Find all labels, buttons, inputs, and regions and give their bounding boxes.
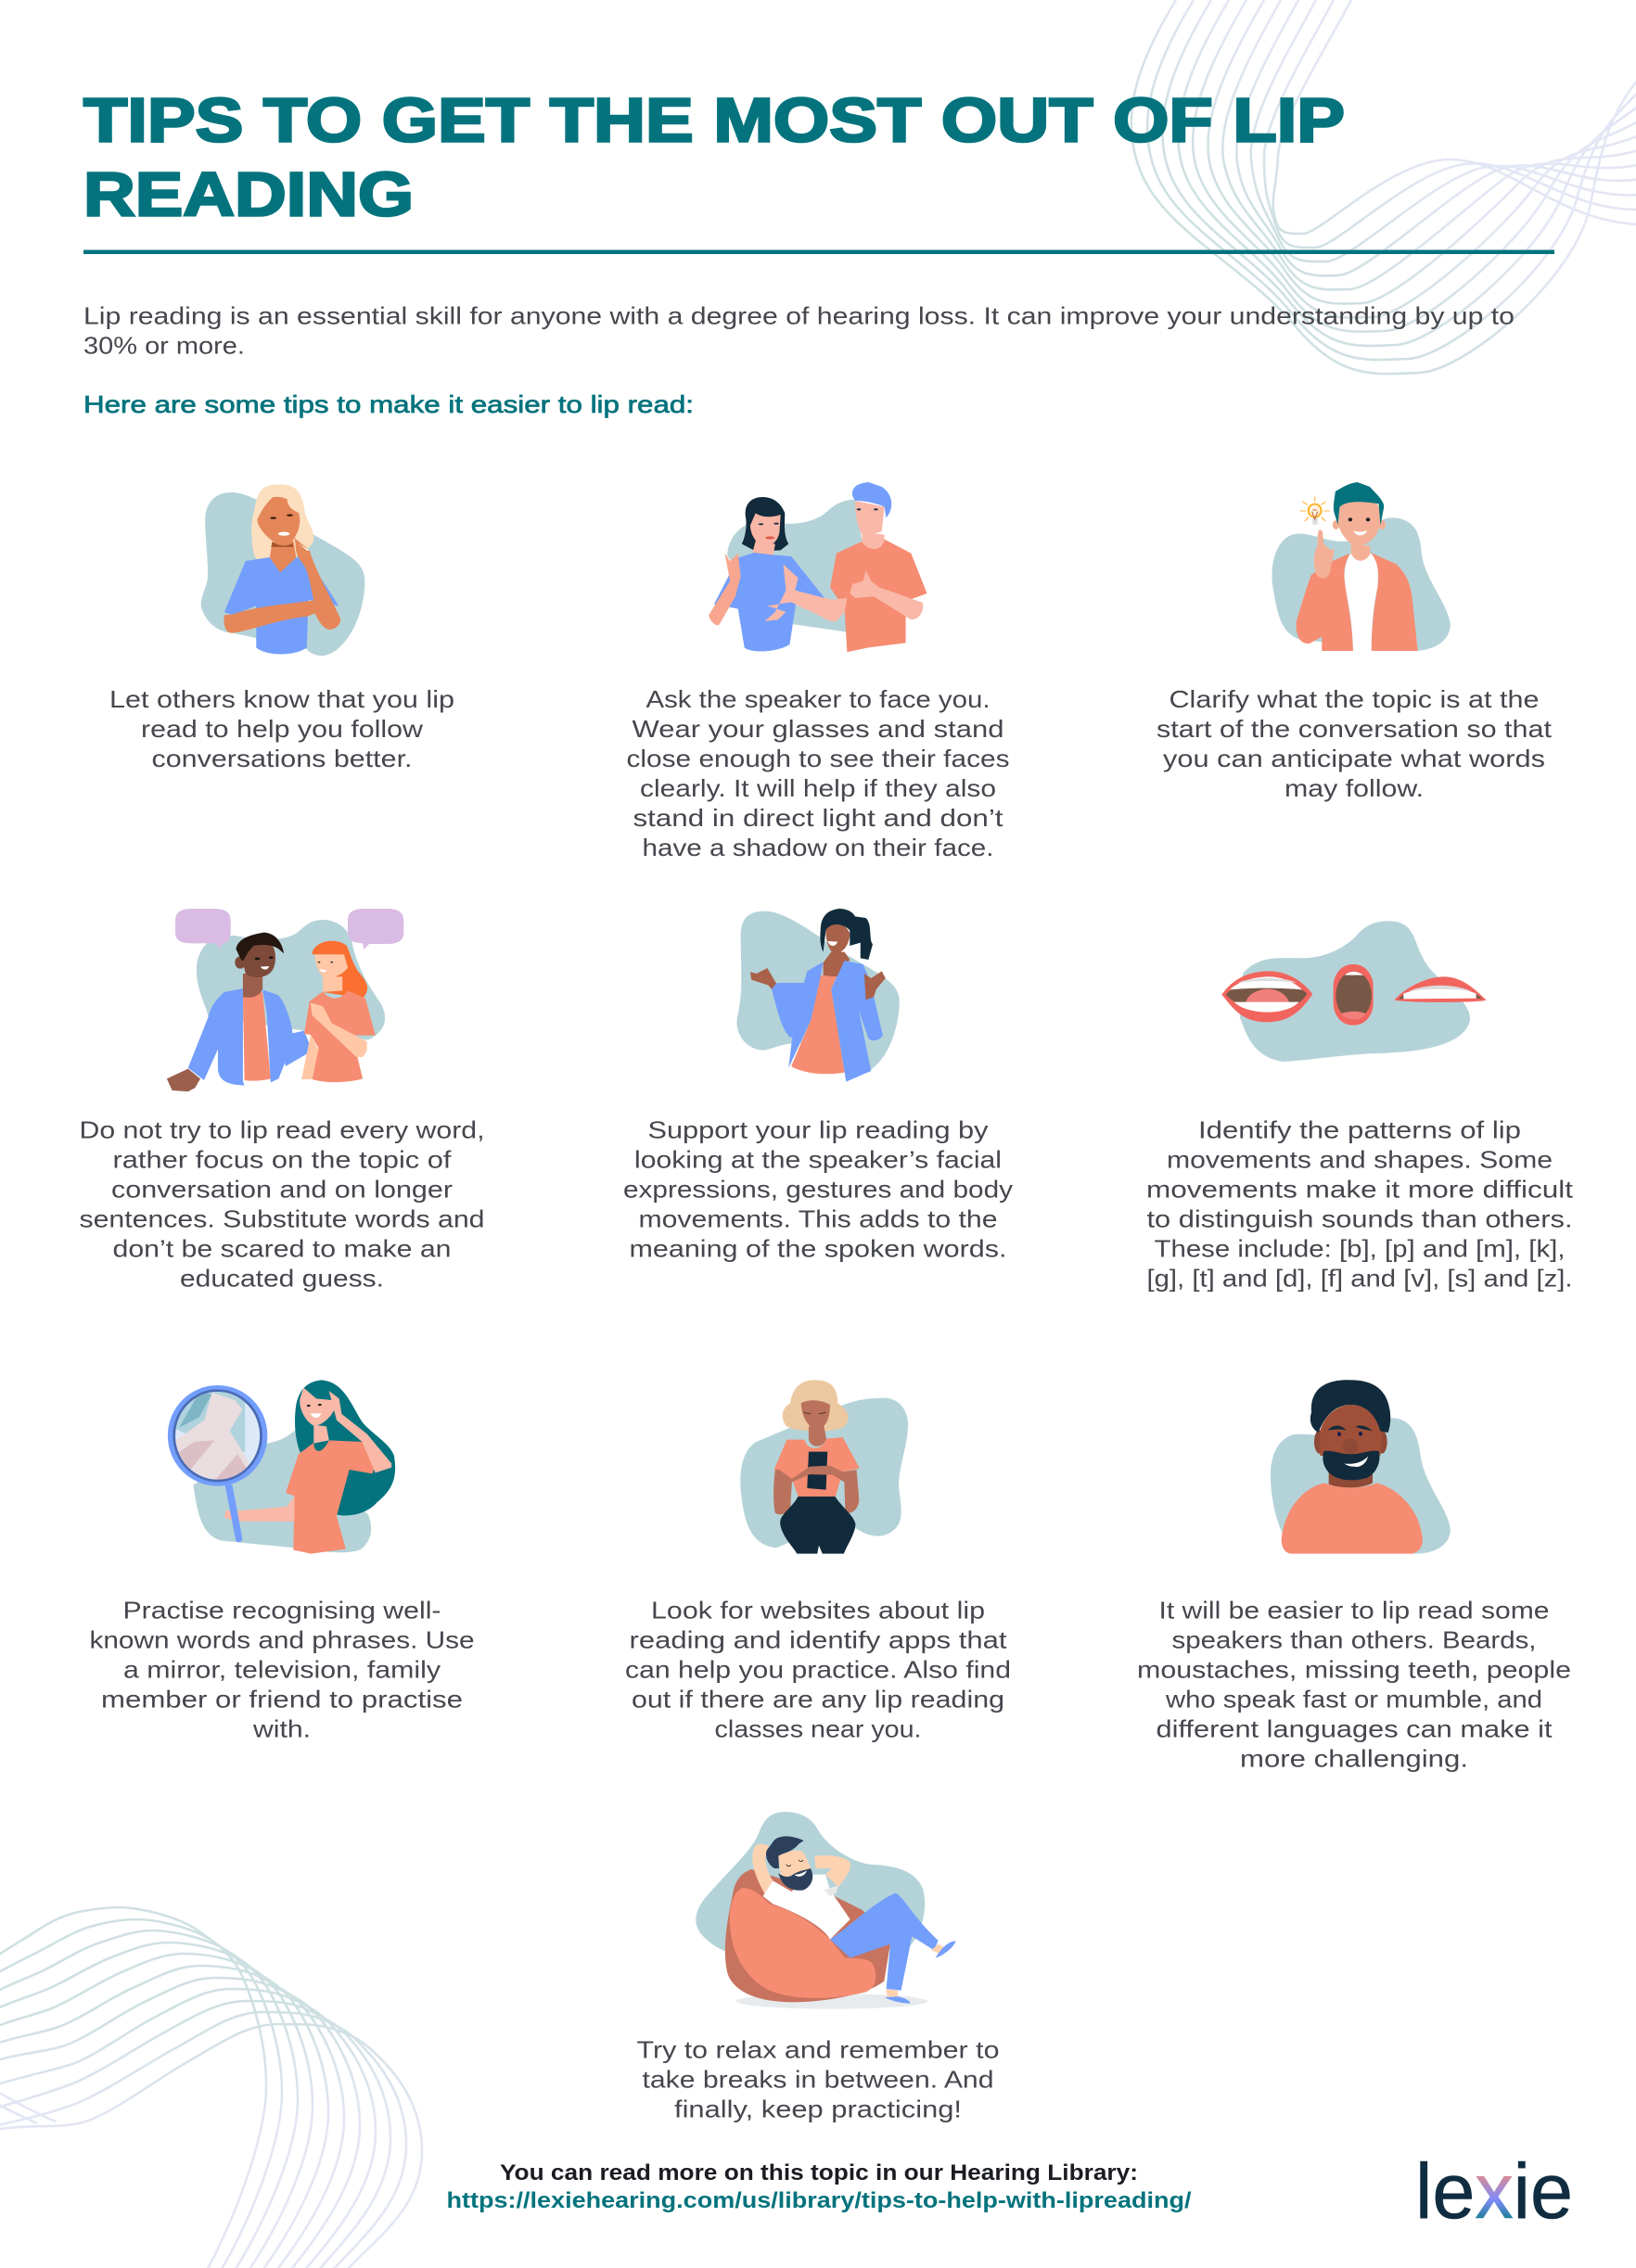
- panel: tip 7: [89, 1380, 475, 1743]
- tip 4 text: rather focus on the topic of: [113, 1146, 452, 1174]
- tip 5 text: looking at the speaker’s facial: [634, 1146, 1002, 1174]
- tip 7 text: known words and phrases. Use: [89, 1626, 475, 1654]
- tip 4 text: don’t be scared to make an: [113, 1235, 451, 1263]
- footer text: https://lexiehearing.com/us/library/tips-to-help-with-lipreading/: [447, 2188, 1192, 2213]
- icon: mirror: [168, 1385, 267, 1542]
- panel: tip 10: [636, 1812, 1000, 2123]
- mouth two: [1334, 964, 1374, 1026]
- subheading: Here are some tips to make it easier to lip read:: [83, 390, 694, 418]
- tip 5 text: movements. This adds to the: [638, 1205, 998, 1233]
- footer text: [447, 2160, 1192, 2213]
- title: TIPS TO GET THE MOST OUT OF LIP: [83, 85, 1345, 156]
- panel: tip 2: [627, 482, 1009, 861]
- tip 7 text: [89, 1597, 475, 1743]
- tip 9 text: who speak fast or mumble, and: [1165, 1686, 1542, 1714]
- tip 4 text: [80, 1116, 484, 1293]
- title: [83, 85, 1345, 230]
- panel: tip 3: [1157, 482, 1553, 802]
- tip 1 text: read to help you follow: [141, 715, 423, 743]
- illustration: man with beard: [1271, 1380, 1451, 1554]
- icon: speech bubble left: [175, 909, 231, 949]
- tip 9 text: different languages can make it: [1156, 1715, 1553, 1743]
- panel: tip 4: [80, 909, 484, 1293]
- title: READING: [83, 159, 414, 230]
- title rule: [83, 250, 1554, 254]
- panel: tip 8: [625, 1380, 1011, 1743]
- tip 9 text: more challenging.: [1240, 1745, 1468, 1773]
- tip 3 text: may follow.: [1285, 774, 1424, 802]
- tip 7 text: member or friend to practise: [101, 1686, 463, 1714]
- tip 6 text: Identify the patterns of lip: [1198, 1116, 1521, 1144]
- tip 6 text: [1146, 1116, 1574, 1293]
- tip 5 text: [623, 1116, 1013, 1263]
- illustration: woman gesturing: [736, 909, 900, 1082]
- tip 2 text: [627, 685, 1009, 861]
- tip 3 text: [1157, 685, 1553, 802]
- tip 10 text: take breaks in between. And: [642, 2066, 994, 2094]
- tip 7 text: with.: [252, 1715, 311, 1743]
- tip 3 text: Clarify what the topic is at the: [1169, 685, 1540, 713]
- tip 4 text: sentences. Substitute words and: [80, 1205, 484, 1233]
- illustration: three mouth shapes: [1221, 921, 1487, 1062]
- tip 2 text: stand in direct light and don’t: [633, 804, 1003, 832]
- decorative wave top right: [1131, 0, 1636, 374]
- panel: tip 1: [109, 484, 454, 772]
- tip 4 text: conversation and on longer: [111, 1176, 453, 1204]
- illustration: woman with mirror: [168, 1380, 395, 1554]
- tip 8 text: reading and identify apps that: [629, 1626, 1007, 1654]
- tip 10 text: finally, keep practicing!: [674, 2096, 962, 2123]
- tip 7 text: a mirror, television, family: [123, 1656, 441, 1684]
- tip 9 text: speakers than others. Beards,: [1172, 1626, 1536, 1654]
- tip 10 text: [636, 2036, 1000, 2123]
- illustration: man with lightbulb: [1272, 482, 1451, 651]
- tip 4 text: Do not try to lip read every word,: [80, 1116, 484, 1144]
- illustration: two people talking: [709, 482, 927, 652]
- tip 3 text: you can anticipate what words: [1163, 745, 1545, 772]
- tip 8 text: classes near you.: [714, 1715, 922, 1743]
- tip 2 text: clearly. It will help if they also: [640, 774, 996, 802]
- tip 8 text: out if there are any lip reading: [632, 1686, 1004, 1714]
- panel: tip 9: [1137, 1380, 1571, 1773]
- tip 2 text: close enough to see their faces: [627, 745, 1009, 772]
- tip 2 text: Ask the speaker to face you.: [645, 685, 991, 713]
- tip 7 text: Practise recognising well-: [122, 1597, 441, 1625]
- tip 6 text: [g], [t] and [d], [f] and [v], [s] and [z].: [1146, 1265, 1573, 1293]
- tip 8 text: Look for websites about lip: [651, 1597, 985, 1625]
- tip 5 text: meaning of the spoken words.: [629, 1235, 1007, 1263]
- tip 6 text: to distinguish sounds than others.: [1146, 1205, 1573, 1233]
- illustration: couple with speech bubbles: [167, 909, 403, 1091]
- tip 8 text: [625, 1597, 1011, 1743]
- tip 9 text: It will be easier to lip read some: [1159, 1597, 1549, 1625]
- panel: tip 6: [1146, 921, 1574, 1293]
- intro text: Lip reading is an essential skill for anyone with a degree of hearing loss. It can improve your understanding by up to: [83, 302, 1515, 330]
- tip 5 text: expressions, gestures and body: [623, 1176, 1013, 1204]
- tip 1 text: [109, 685, 454, 772]
- tip 6 text: movements and shapes. Some: [1167, 1146, 1553, 1174]
- tip 9 text: [1137, 1597, 1571, 1773]
- tip 2 text: Wear your glasses and stand: [633, 715, 1003, 743]
- panel: tip 5: [623, 909, 1013, 1263]
- tip 6 text: These include: [b], [p] and [m], [k],: [1154, 1235, 1566, 1263]
- tip 6 text: movements make it more difficult: [1146, 1176, 1574, 1204]
- icon: speech bubble right: [348, 909, 403, 949]
- decorative wave bottom left: [0, 1907, 422, 2268]
- logo: lexie: lexie: [1415, 2147, 1573, 2235]
- tip 9 text: moustaches, missing teeth, people: [1137, 1656, 1571, 1684]
- intro text: [83, 302, 1515, 360]
- mouth three: [1394, 976, 1487, 1002]
- footer text: You can read more on this topic in our Hearing Library:: [500, 2160, 1138, 2185]
- tip 1 text: Let others know that you lip: [109, 685, 454, 713]
- tip 10 text: Try to relax and remember to: [636, 2036, 1000, 2064]
- icon: lightbulb: [1300, 497, 1330, 525]
- tip 2 text: have a shadow on their face.: [642, 834, 994, 861]
- illustration: woman thinking: [201, 484, 364, 656]
- illustration: woman with phone: [740, 1380, 908, 1554]
- mouth one: [1221, 971, 1312, 1022]
- intro text: 30% or more.: [83, 332, 245, 360]
- tip 3 text: start of the conversation so that: [1157, 715, 1553, 743]
- tip 1 text: conversations better.: [152, 745, 412, 772]
- tip 5 text: Support your lip reading by: [647, 1116, 989, 1144]
- illustration: man relaxing on beanbag: [696, 1812, 956, 2009]
- tip 4 text: educated guess.: [180, 1265, 384, 1293]
- tip 8 text: can help you practice. Also find: [625, 1656, 1011, 1684]
